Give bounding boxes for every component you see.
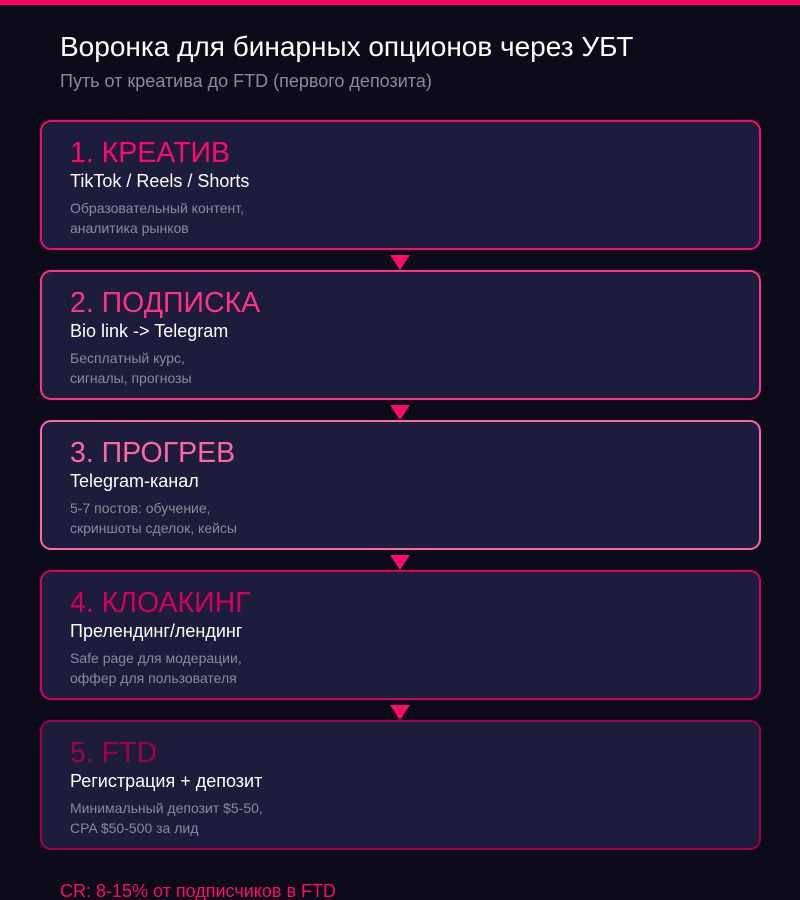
panel: step 3: 3. ПРОГРЕВ (70, 437, 235, 469)
panel: step 2: 2. ПОДПИСКА (70, 287, 260, 319)
panel: step 1: Образовательный контент, (70, 200, 244, 216)
panel: step 3: Telegram-канал (70, 471, 199, 491)
subtitle: Путь от креатива до FTD (первого депозита) (60, 71, 432, 91)
arrow (390, 555, 410, 570)
panel: step 2 (41, 271, 760, 399)
arrow (390, 405, 410, 420)
panel: step 4: Прелендинг/лендинг (70, 621, 243, 641)
panel: step 5 (41, 721, 760, 849)
panel: step 2: сигналы, прогнозы (70, 370, 192, 386)
panel: step 5: CPA $50-500 за лид (70, 820, 198, 836)
panel: step 3: скриншоты сделок, кейсы (70, 520, 237, 536)
panel: step 2: Bio link -> Telegram (70, 321, 228, 341)
panel: step 2: Бесплатный курс, (70, 350, 185, 366)
panel: step 3 (41, 421, 760, 549)
panel: step 5: Минимальный депозит $5-50, (70, 800, 263, 816)
panel: step 4: Safe page для модерации, (70, 650, 242, 666)
panel: step 1: TikTok / Reels / Shorts (70, 171, 249, 191)
panel: step 5: 5. FTD (70, 737, 157, 769)
panel: step 4: 4. КЛОАКИНГ (70, 587, 251, 619)
panel: step 4: оффер для пользователя (70, 670, 237, 686)
panel: step 1: 1. КРЕАТИВ (70, 137, 230, 169)
panel: step 3: 5-7 постов: обучение, (70, 500, 211, 516)
arrow (390, 255, 410, 270)
panel: step 4 (41, 571, 760, 699)
panel: step 1: аналитика рынков (70, 220, 189, 236)
title: Воронка для бинарных опционов через УБТ (60, 31, 633, 62)
arrow (390, 705, 410, 720)
panel: step 1 (41, 121, 760, 249)
panel: step 5: Регистрация + депозит (70, 771, 262, 791)
